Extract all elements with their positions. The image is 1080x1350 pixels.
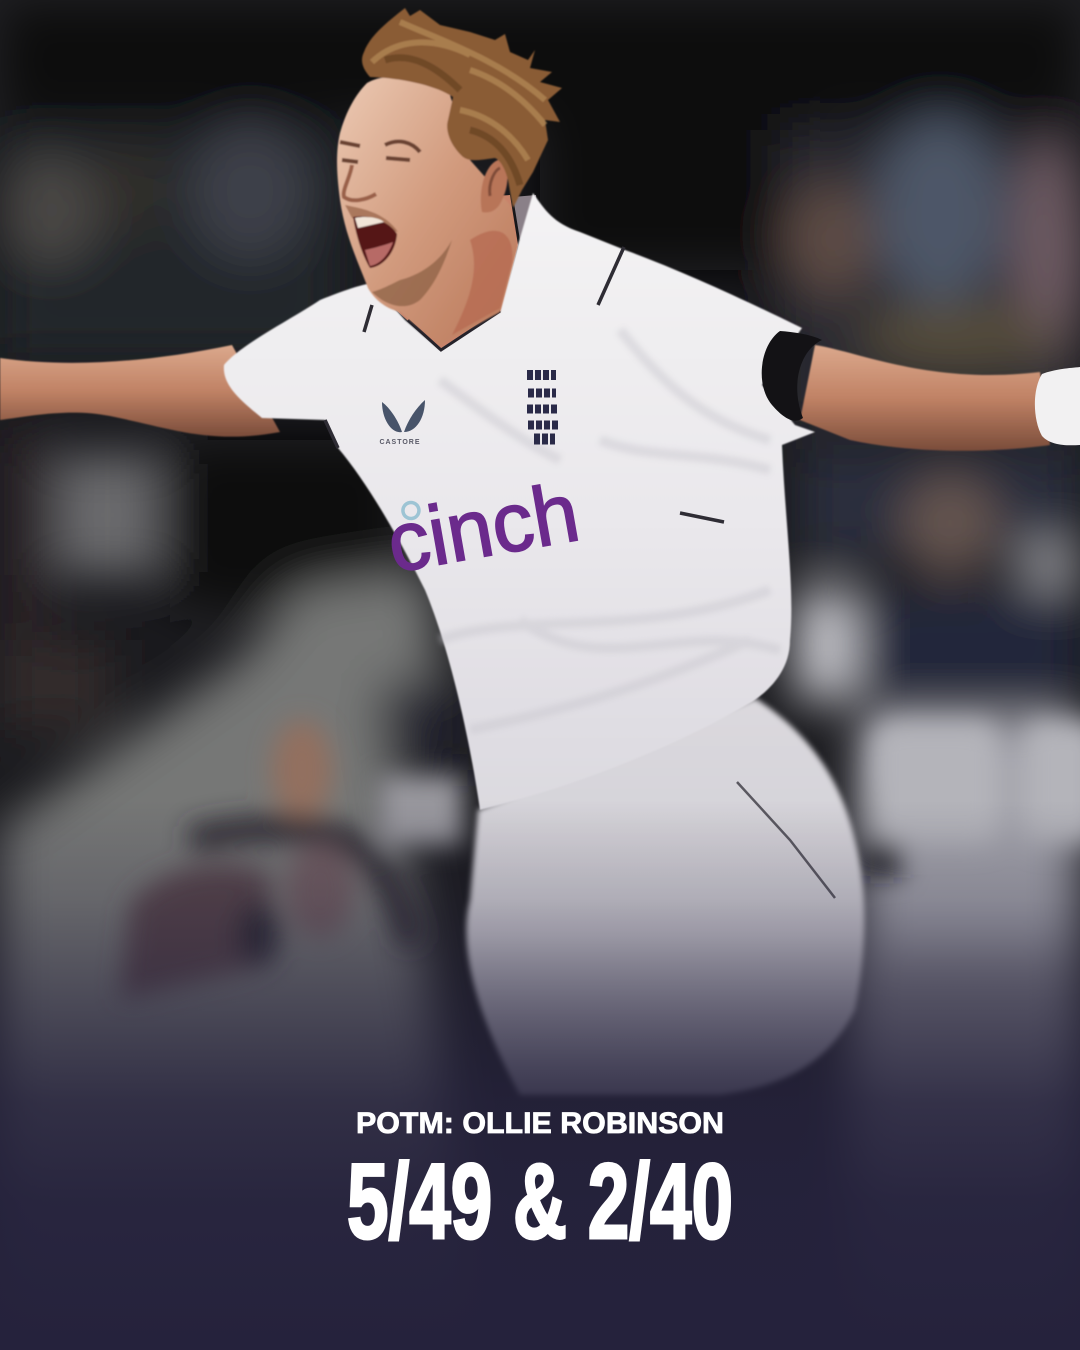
stubble and jaw shadow (372, 240, 452, 306)
ECB three lions crest (527, 375, 559, 439)
tongue (365, 242, 393, 266)
dark gradient overlay (0, 800, 1080, 1350)
stat figures: 5/49 & 2/40 (347, 1141, 733, 1261)
nose (344, 165, 376, 200)
subtitle: POTM: OLLIE ROBINSON (356, 1107, 724, 1140)
trousers (466, 698, 864, 1095)
cinch sponsor logo: cinch (380, 464, 586, 590)
hair (362, 8, 562, 208)
left arm (0, 345, 280, 437)
Castore logo (379, 400, 425, 446)
raglan trim (325, 247, 724, 522)
moustache shade (345, 205, 398, 232)
head (337, 8, 562, 345)
ear side of face (337, 77, 517, 345)
shirt creases (440, 330, 780, 730)
teeth (355, 217, 384, 228)
collar trim (408, 311, 500, 350)
shirt (224, 193, 815, 810)
black armband (762, 331, 822, 421)
open mouth (353, 216, 397, 268)
trouser seam (737, 782, 835, 898)
neck shadow (452, 231, 512, 335)
wristband (1035, 367, 1080, 445)
inner collar (513, 195, 538, 240)
ear (481, 160, 508, 212)
Castore logo: CASTORE (379, 439, 421, 446)
caption (347, 1107, 733, 1261)
neck (385, 195, 518, 350)
right arm (800, 345, 1050, 451)
closed eyes and brows (340, 141, 420, 162)
